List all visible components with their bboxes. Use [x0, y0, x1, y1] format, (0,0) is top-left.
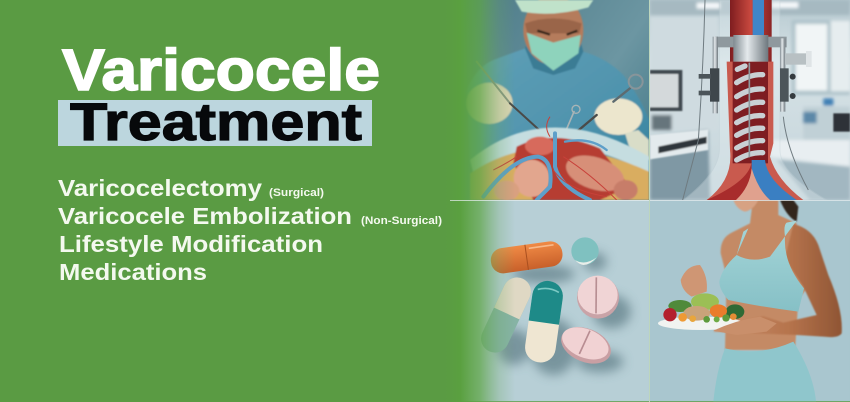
- raised fist: [681, 265, 707, 297]
- panel: embolization coil device: [650, 0, 850, 200]
- teal ball: [571, 237, 599, 265]
- blue veins: [483, 133, 607, 200]
- treatment list: Varicocele Embolization: [58, 203, 352, 229]
- silver coil: [737, 63, 763, 160]
- orange capsule: [490, 241, 562, 274]
- panel: fit woman with healthy plate: [650, 200, 850, 401]
- hand under plate: [714, 317, 776, 334]
- treatment list: Medications: [59, 259, 207, 285]
- treatment list: Lifestyle Modification: [59, 231, 323, 257]
- pill shadows: [497, 252, 631, 375]
- sports bra: [719, 221, 804, 312]
- title: Varicocele: Varicocele: [62, 38, 380, 103]
- surgical site anatomy: [470, 127, 649, 201]
- oval pink tablet: [561, 327, 611, 364]
- torso and arm: [713, 200, 842, 350]
- catheter wires: [683, 0, 808, 200]
- teal and cream capsule: [525, 280, 563, 362]
- panel dividers: [450, 0, 850, 402]
- green fade overlay: [445, 0, 515, 402]
- heading: Treatment with highlight box: Treatment: [70, 93, 362, 152]
- round pink tablet: [577, 276, 619, 319]
- cream and green capsule: [481, 277, 531, 352]
- instruments: scissors and forceps: [476, 61, 644, 130]
- panel: assorted pills: [450, 200, 649, 401]
- leggings: [713, 342, 816, 401]
- metal clamp: [699, 35, 812, 113]
- treatment list: [58, 175, 442, 285]
- vein and artery vessel: [707, 0, 803, 200]
- treatment list: Varicocelectomy: [58, 175, 262, 201]
- treatment list: (Non-Surgical): [361, 215, 442, 227]
- panel: surgeon operating: [450, 0, 649, 201]
- glass tube: [683, 0, 827, 200]
- plate of food: [658, 293, 744, 330]
- treatment list: (Surgical): [269, 187, 324, 199]
